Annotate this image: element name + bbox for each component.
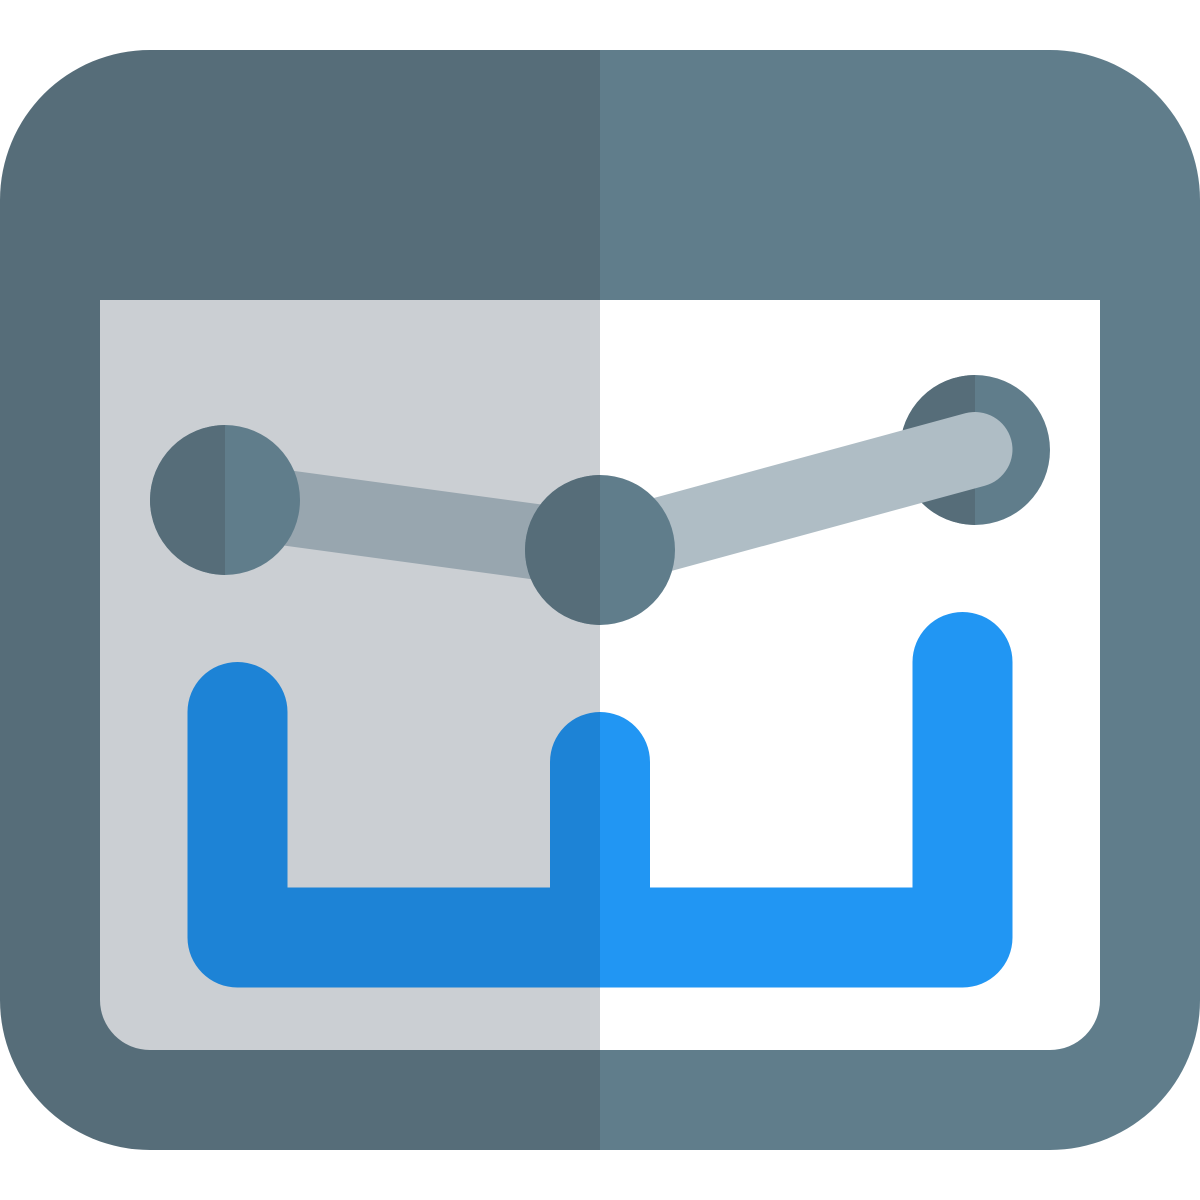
icon: right data point bbox=[900, 375, 1050, 525]
window content panel bbox=[100, 300, 1100, 1050]
icon: middle data point bbox=[525, 475, 675, 625]
line chart connector bbox=[280, 412, 1012, 590]
icon: left data point bbox=[150, 425, 300, 575]
bar chart bbox=[188, 612, 1012, 988]
